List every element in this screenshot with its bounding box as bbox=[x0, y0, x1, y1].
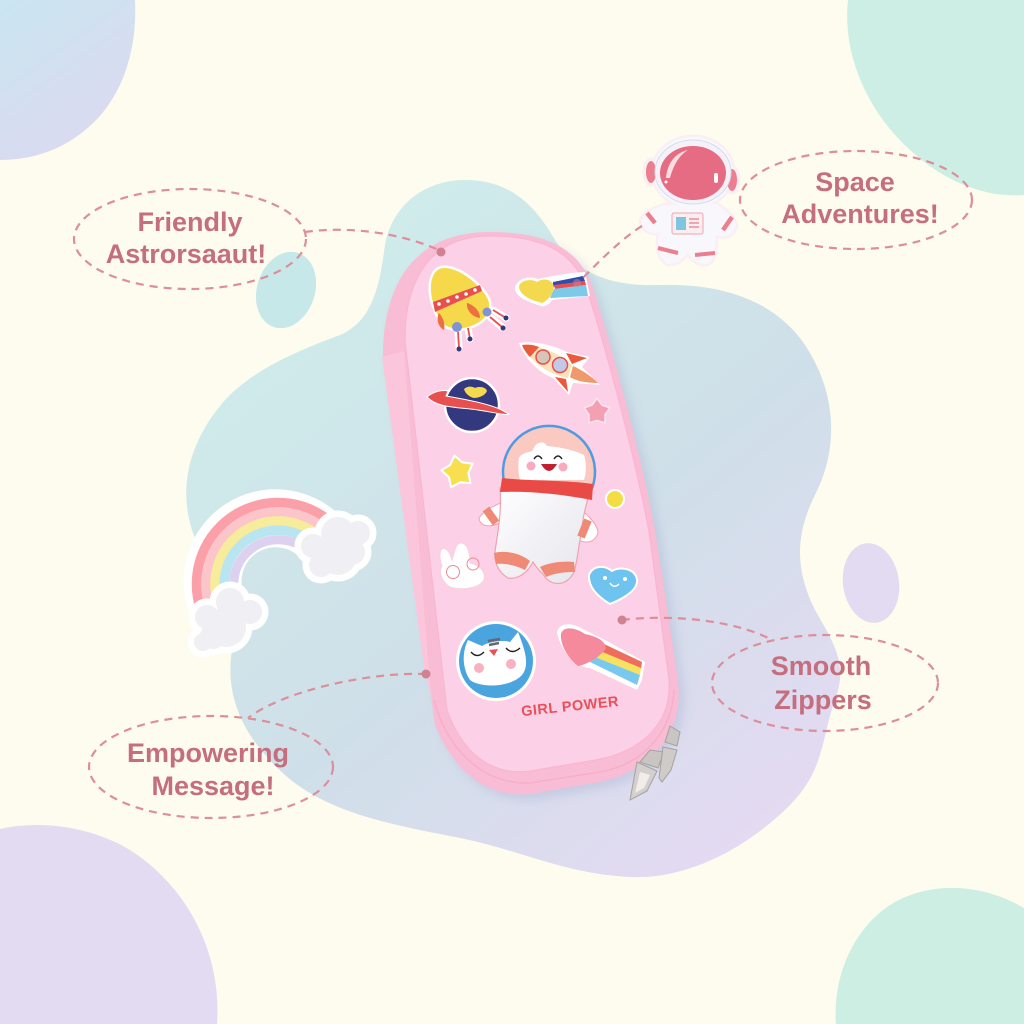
side gusset bbox=[382, 351, 432, 700]
red scarf bbox=[500, 478, 593, 500]
central gradient blob bbox=[186, 180, 840, 877]
sticker: bunny with glasses bbox=[440, 543, 484, 589]
callout: space adventures: Space bbox=[815, 167, 895, 197]
astronaut body fill bbox=[641, 137, 736, 264]
case shadow bbox=[390, 238, 685, 800]
blob: top right corner bbox=[847, 0, 1024, 195]
callout: empowering message: Message! bbox=[151, 771, 275, 801]
astronaut leg bands bbox=[658, 248, 715, 255]
sticker: blue smiling heart bbox=[589, 567, 637, 604]
sticker: yellow dot bbox=[606, 490, 624, 508]
bear body bbox=[495, 488, 590, 584]
callout: smooth zippers: Smooth bbox=[771, 651, 871, 681]
sticker: yellow ufo bbox=[431, 268, 508, 352]
rainbow band lavender bbox=[234, 540, 310, 609]
rainbow band yellow bbox=[215, 521, 324, 609]
sticker: pink heart with rainbow tail bbox=[557, 624, 645, 690]
blob: bottom left corner bbox=[0, 825, 217, 1024]
blob: top left corner bbox=[0, 0, 135, 160]
sticker: cat in blue circle bbox=[456, 621, 536, 701]
callout: friendly astronaut: Friendly bbox=[137, 207, 243, 237]
callout: smooth zippers: Zippers bbox=[774, 685, 872, 715]
astronaut arm bands bbox=[647, 213, 732, 230]
sticker: astronaut bbox=[641, 137, 738, 264]
leader line: empowering message bbox=[248, 670, 430, 718]
sticker: rocket bbox=[519, 342, 600, 395]
callout: space adventures bbox=[740, 151, 972, 249]
callout: empowering message: Empowering bbox=[127, 738, 289, 768]
zipper seam line bbox=[434, 690, 674, 783]
pencil case bbox=[382, 232, 685, 800]
callout: friendly astronaut: Astrorsaaut! bbox=[106, 239, 266, 269]
sticker: navy planet bbox=[427, 378, 509, 432]
astronaut visor bbox=[660, 146, 726, 200]
sticker: yellow star bbox=[439, 452, 476, 489]
cloud outlines bbox=[194, 517, 370, 651]
callout: friendly astronaut bbox=[74, 189, 306, 289]
callout: smooth zippers bbox=[712, 635, 938, 731]
rainbow band red bbox=[197, 503, 337, 609]
callout: empowering message bbox=[89, 716, 333, 818]
blob: bottom right corner bbox=[836, 888, 1024, 1024]
astronaut ears bbox=[646, 161, 737, 191]
bear face bbox=[518, 443, 586, 480]
bear arm bands bbox=[486, 509, 588, 537]
astronaut white outline bbox=[641, 137, 738, 264]
bear left arm bbox=[479, 500, 510, 526]
case outer shell and zipper bbox=[383, 232, 679, 794]
visor highlights bbox=[664, 150, 718, 184]
bear leg bands bbox=[494, 552, 575, 577]
small teal blob bbox=[246, 244, 326, 336]
case front face bbox=[405, 236, 669, 772]
sticker: yellow heart with rainbow tail bbox=[515, 272, 590, 306]
leader line: space adventures bbox=[573, 226, 642, 287]
helmet bbox=[503, 426, 595, 490]
zipper pulls bbox=[630, 726, 680, 800]
leader line: friendly astronaut bbox=[305, 230, 446, 256]
astronaut chest panel bbox=[672, 213, 703, 234]
sticker: rainbow bbox=[194, 503, 370, 651]
printed text: girl power: GIRL POWER bbox=[520, 694, 620, 720]
astronaut helmet bbox=[655, 140, 731, 204]
sticker: bear astronaut bbox=[479, 426, 598, 584]
rainbow band pink bbox=[206, 512, 330, 609]
sticker: pink star bbox=[584, 398, 610, 423]
cloud fills bbox=[194, 517, 370, 651]
bear right arm bbox=[575, 505, 598, 542]
small lavender blob bbox=[838, 539, 904, 627]
rainbow white outline bbox=[213, 518, 324, 609]
ufo outline bbox=[431, 268, 506, 348]
leader line: smooth zippers bbox=[618, 616, 772, 640]
callout: space adventures: Adventures! bbox=[781, 199, 939, 229]
rainbow band blue bbox=[224, 530, 317, 609]
